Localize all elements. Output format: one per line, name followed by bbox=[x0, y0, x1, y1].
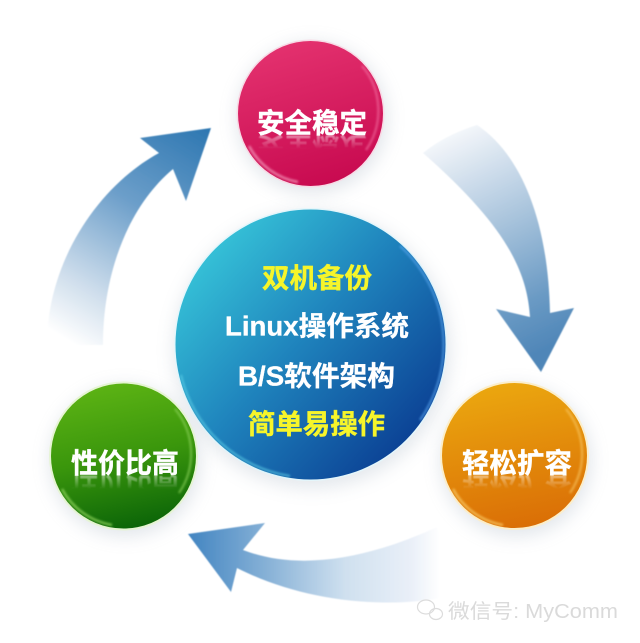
watermark bbox=[418, 600, 618, 623]
panel: pink circle 安全稳定 bbox=[236, 40, 387, 193]
panel: center circle bbox=[174, 208, 450, 488]
panel: green circle 性价比高 bbox=[49, 382, 200, 536]
text: B/S软件架构: B/S软件架构 bbox=[238, 360, 395, 392]
text reflection: 安全稳定 bbox=[257, 132, 367, 162]
icon: wechat logo bbox=[418, 600, 442, 620]
arrow: top right, pointing down to orange circle bbox=[423, 125, 574, 372]
text: 微信号 MyComm: 微信号: MyComm bbox=[448, 600, 618, 623]
panel: orange circle 轻松扩容 bbox=[440, 381, 591, 536]
text: 安全稳定: 安全稳定 bbox=[257, 108, 367, 138]
text: 轻松扩容: 轻松扩容 bbox=[462, 448, 572, 478]
text reflection: 性价比高 bbox=[71, 472, 179, 502]
text reflection: 轻松扩容 bbox=[462, 472, 572, 502]
text: 双机备份: 双机备份 bbox=[262, 262, 372, 294]
arrow: bottom, pointing left to green circle bbox=[188, 523, 448, 603]
text: 性价比高: 性价比高 bbox=[71, 448, 179, 478]
text: Linux操作系统: Linux操作系统 bbox=[225, 310, 409, 342]
arrow: left, pointing up to pink circle bbox=[47, 128, 211, 345]
text: 简单易操作: 简单易操作 bbox=[248, 408, 385, 440]
